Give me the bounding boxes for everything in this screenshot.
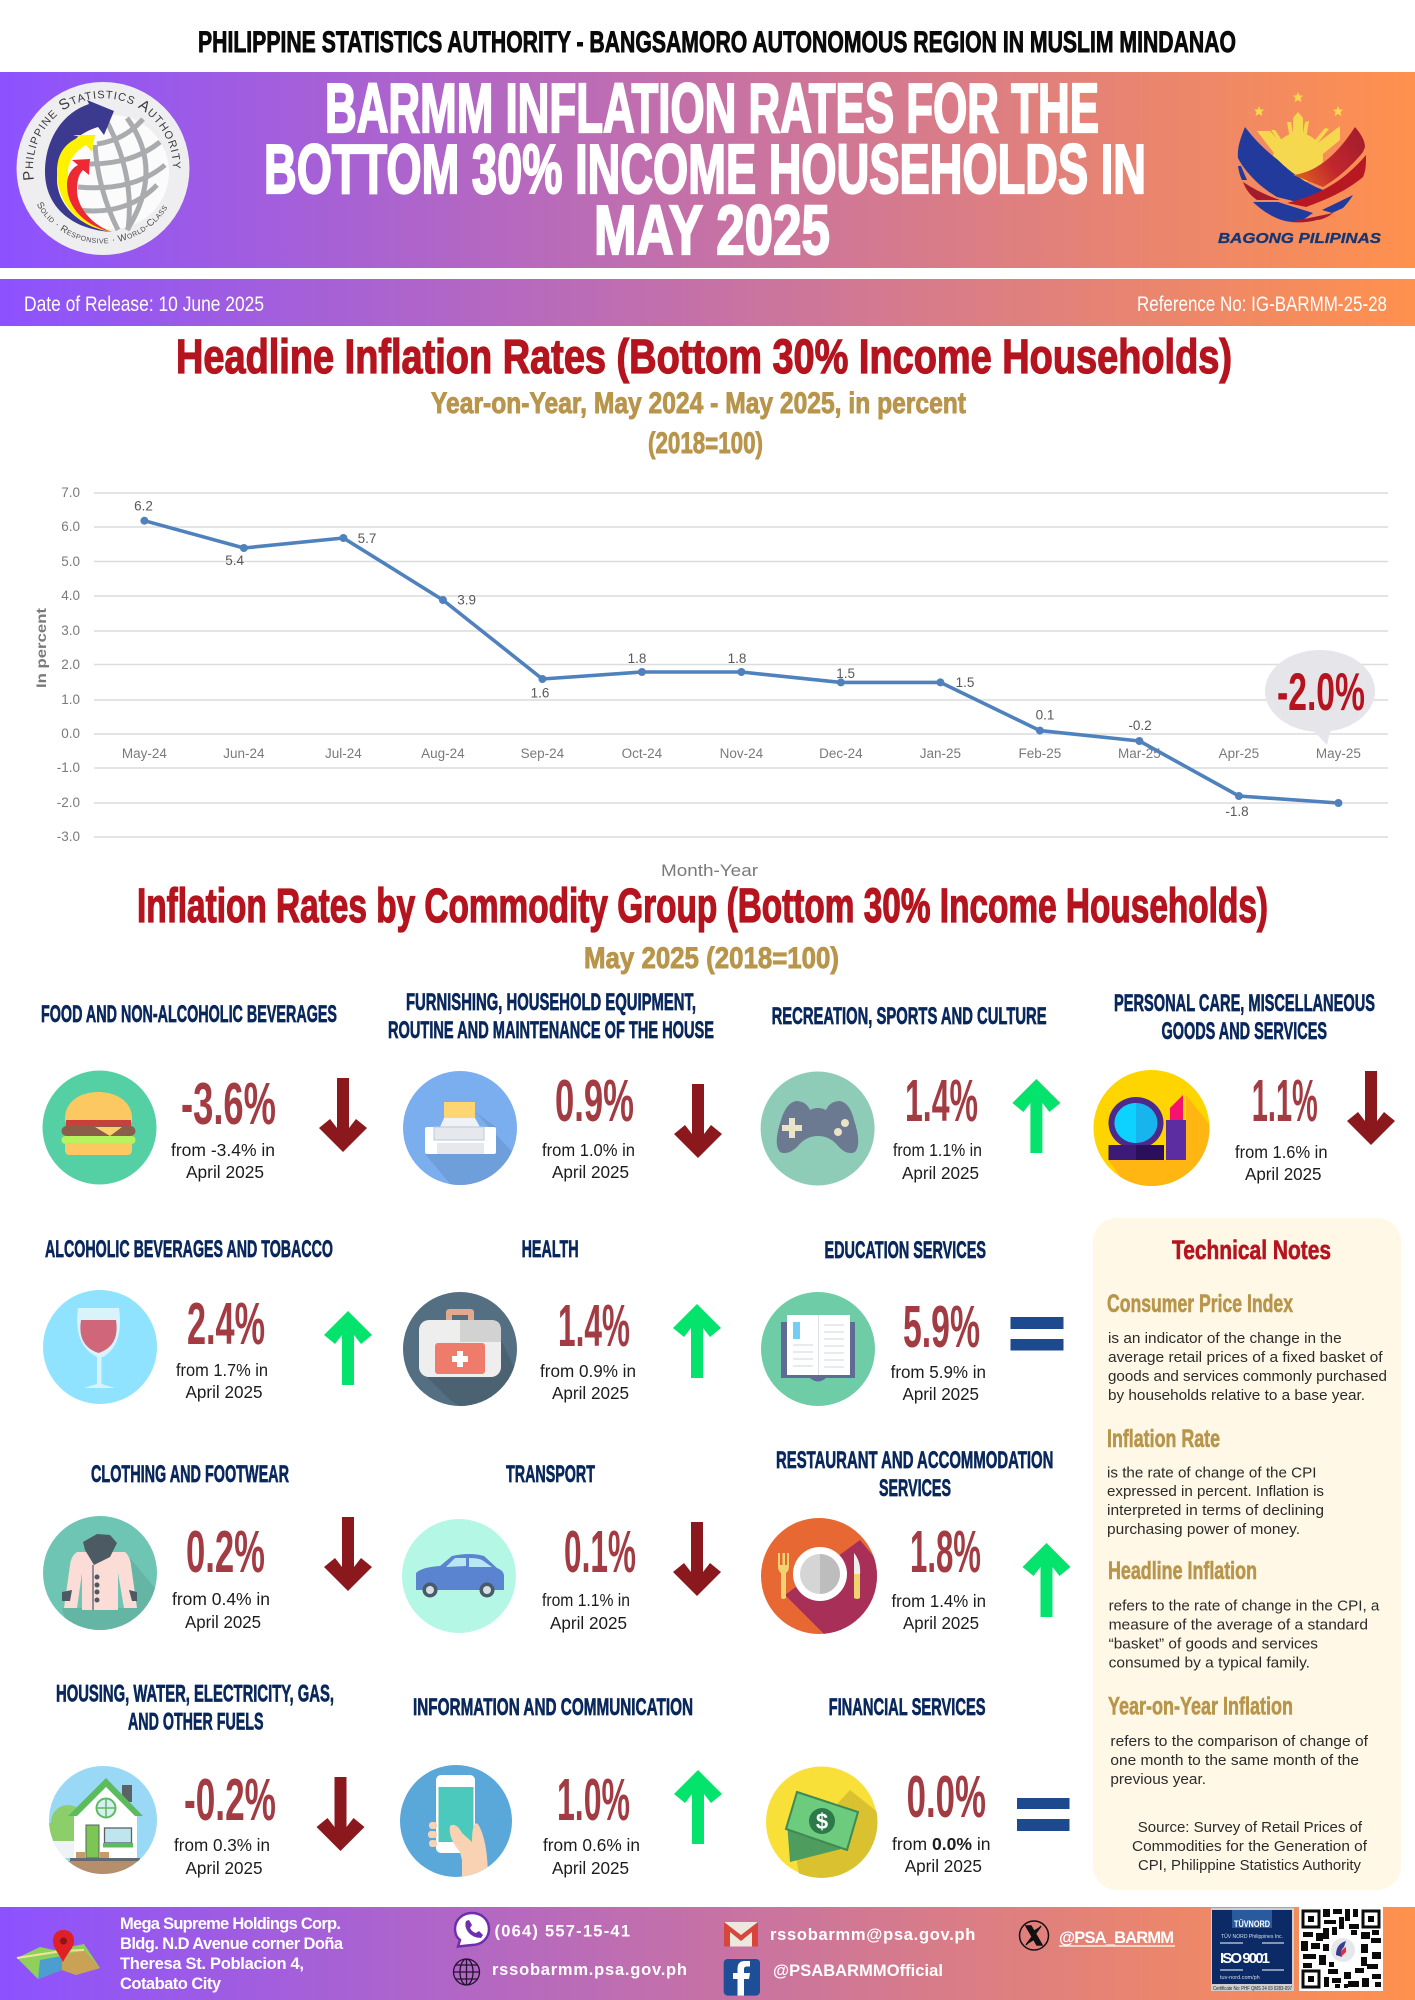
data labels: 5.4 — [225, 553, 245, 568]
arrow: down — [324, 1517, 372, 1591]
item: clothing and footwear — [43, 1461, 372, 1640]
data labels: 1.6 — [531, 686, 549, 700]
item: recreation: from 1.1% in — [893, 1140, 982, 1160]
item: financial services: from 0.0% in — [892, 1834, 990, 1854]
data labels — [134, 498, 1249, 819]
x axis labels: Aug-24 — [421, 746, 465, 761]
note: consumer price index: is an indicator of the change in the — [1108, 1331, 1342, 1347]
item: financial services — [766, 1698, 1070, 1878]
x axis labels — [122, 746, 1361, 761]
phone number: (064) 557-15-41 — [494, 1922, 630, 1940]
note: inflation rate — [1107, 1425, 1324, 1538]
note: inflation rate: purchasing power of money. — [1107, 1522, 1300, 1538]
note: consumer price index — [1107, 1290, 1387, 1404]
logo: Philippine Statistics Authority: Philippine Statistics Authority — [23, 90, 181, 180]
arrow: up — [673, 1304, 721, 1378]
y axis labels: -2.0 — [57, 795, 80, 810]
badge: ISO 9001 certification: TÜV NORD Philippines Inc. — [1221, 1933, 1283, 1940]
email address: rssobarmm@psa.gov.ph — [770, 1926, 975, 1944]
item: food and non-alcoholic beverages: -3.6% — [181, 1071, 276, 1137]
item: education services — [761, 1237, 1064, 1406]
item: transport: 0.1% — [564, 1519, 636, 1585]
item: health — [403, 1236, 721, 1420]
note: headline inflation: consumed by a typical family. — [1109, 1656, 1310, 1672]
y axis labels: 3.0 — [61, 623, 80, 638]
data labels: 1.5 — [836, 666, 855, 681]
icon: open book — [761, 1292, 875, 1406]
line chart: headline inflation — [33, 485, 1388, 880]
note: headline inflation — [1108, 1557, 1380, 1672]
item: health: from 0.9% in — [540, 1361, 636, 1381]
data labels: 0.1 — [1036, 708, 1054, 722]
address: Cotabato City — [120, 1975, 222, 1993]
commodity subtitle: May 2025 (2018=100) — [584, 942, 839, 975]
X handle: @PSA_BARMM — [1059, 1929, 1174, 1947]
equals sign: unchanged — [1017, 1798, 1070, 1831]
QR code — [1299, 1907, 1383, 1991]
item: financial services: FINANCIAL SERVICES — [829, 1694, 986, 1721]
item: education services: 5.9% — [903, 1294, 980, 1360]
item: clothing and footwear: April 2025 — [185, 1612, 261, 1632]
address: Theresa St. Poblacion 4, — [120, 1955, 304, 1973]
arrow: up — [1022, 1543, 1070, 1617]
item: restaurant and accommodation: SERVICES — [879, 1475, 951, 1502]
data labels: 5.7 — [358, 531, 376, 546]
item: financial services: 0.0% — [907, 1764, 986, 1830]
icon: phone — [455, 1913, 489, 1946]
icon: plate and cutlery — [761, 1518, 877, 1634]
item: furnishing: FURNISHING, HOUSEHOLD EQUIPMENT, — [406, 989, 696, 1016]
y axis labels: 6.0 — [61, 519, 80, 534]
note: consumer price index: average retail prices of a fixed basket of — [1108, 1350, 1384, 1366]
item: personal care: 1.1% — [1252, 1068, 1318, 1134]
x axis labels: Feb-25 — [1019, 746, 1061, 761]
data labels: 1.5 — [956, 675, 974, 690]
item: alcoholic beverages — [43, 1236, 372, 1404]
data labels: -0.2 — [1128, 718, 1152, 733]
arrow: up — [674, 1770, 722, 1844]
title banner — [0, 69, 1415, 269]
item: housing — [49, 1680, 364, 1878]
data labels: 1.8 — [628, 651, 646, 666]
item: recreation: April 2025 — [902, 1163, 979, 1183]
item: information and communication: 1.0% — [557, 1767, 630, 1833]
icon: coat — [43, 1516, 157, 1630]
icon: smartphone in hand — [400, 1765, 512, 1880]
icon: X — [1020, 1921, 1048, 1950]
item: restaurant and accommodation: RESTAURANT AND ACCOMMODATION — [776, 1447, 1053, 1474]
data labels: 1.8 — [728, 651, 746, 666]
source note: Commodities for the Generation of — [1132, 1839, 1368, 1855]
item: personal care — [1094, 990, 1395, 1190]
note: year-on-year inflation — [1108, 1692, 1369, 1788]
y axis labels: -3.0 — [57, 829, 80, 844]
item: restaurant and accommodation — [761, 1447, 1070, 1640]
note: inflation rate: expressed in percent. Inflation is — [1107, 1484, 1324, 1500]
footer — [0, 1907, 1415, 2000]
facebook handle: @PSABARMMOfficial — [773, 1962, 943, 1980]
x axis labels: Nov-24 — [720, 746, 764, 761]
item: housing: from 0.3% in — [174, 1835, 270, 1855]
arrow: down — [1347, 1071, 1395, 1145]
badge: ISO 9001 certification: Certificate No: PHF QMS 24 03 0283-097 — [1213, 1986, 1292, 1992]
website: rssobarmm.psa.gov.ph — [492, 1961, 687, 1979]
source note — [1132, 1820, 1368, 1874]
source note: CPI, Philippine Statistics Authority — [1138, 1858, 1362, 1874]
item: furnishing: April 2025 — [552, 1162, 629, 1182]
address — [120, 1915, 344, 1993]
item: information and communication — [400, 1694, 722, 1880]
item: alcoholic beverages: from 1.7% in — [176, 1360, 268, 1380]
item: furnishing — [388, 989, 722, 1190]
y axis labels: 7.0 — [61, 485, 80, 500]
icon: facebook — [724, 1959, 760, 1996]
release info bar — [0, 279, 1415, 326]
item: information and communication: from 0.6% in — [543, 1835, 640, 1855]
note: headline inflation: Headline Inflation — [1108, 1557, 1257, 1585]
arrow: down — [674, 1084, 722, 1158]
item: information and communication: April 2025 — [552, 1858, 629, 1878]
item: alcoholic beverages: April 2025 — [186, 1382, 262, 1402]
badge: ISO 9001 certification: TÜVNORD — [1234, 1919, 1270, 1930]
item: food and non-alcoholic beverages: April 2025 — [186, 1162, 264, 1182]
item: alcoholic beverages: 2.4% — [187, 1291, 265, 1357]
item: recreation: RECREATION, SPORTS AND CULTURE — [772, 1003, 1047, 1030]
data labels: -1.8 — [1225, 804, 1249, 819]
x axis labels: Jun-24 — [223, 746, 265, 761]
chart subtitle: (2018=100) — [648, 427, 763, 460]
item: housing: April 2025 — [186, 1858, 262, 1878]
arrow: down — [316, 1777, 364, 1851]
y axis labels: -1.0 — [57, 760, 80, 775]
address: Bldg. N.D Avenue corner Doña — [120, 1935, 344, 1953]
item: food and non-alcoholic beverages: from -3.4% in — [171, 1140, 275, 1160]
icon: mirror and lipstick — [1094, 1070, 1210, 1186]
y axis labels: 0.0 — [61, 726, 80, 741]
badge: ISO 9001 certification: ISO 9001 — [1220, 1950, 1270, 1967]
x axis labels: Sep-24 — [521, 746, 565, 761]
x axis labels: Jul-24 — [325, 746, 362, 761]
arrow: up — [1012, 1079, 1060, 1153]
data labels: 3.9 — [457, 592, 476, 608]
item: housing: HOUSING, WATER, ELECTRICITY, GAS, — [56, 1680, 334, 1708]
address: Mega Supreme Holdings Corp. — [120, 1915, 341, 1933]
panel: technical notes — [1093, 1218, 1401, 1890]
item: clothing and footwear: from 0.4% in — [172, 1589, 270, 1609]
item: housing: AND OTHER FUELS — [128, 1708, 264, 1736]
badge: ISO 9001 certification: tuv-nord.com/ph — [1220, 1975, 1260, 1981]
x axis labels: Apr-25 — [1219, 746, 1259, 761]
arrow: down — [319, 1078, 367, 1152]
x axis labels: Mar-25 — [1118, 746, 1161, 761]
icon: globe — [454, 1959, 480, 1985]
note: inflation rate: interpreted in terms of declining — [1107, 1503, 1324, 1519]
item: financial services: April 2025 — [905, 1856, 982, 1876]
note: year-on-year inflation: Year-on-Year Inflation — [1108, 1692, 1293, 1720]
item: furnishing: from 1.0% in — [542, 1140, 635, 1160]
item: transport — [402, 1461, 721, 1633]
y axis labels: 2.0 — [61, 657, 80, 672]
note: year-on-year inflation: refers to the comparison of change of — [1110, 1734, 1369, 1750]
note: headline inflation: measure of the average of a standard — [1109, 1618, 1368, 1634]
item: education services: EDUCATION SERVICES — [824, 1237, 986, 1264]
source note: Source: Survey of Retail Prices of — [1138, 1820, 1363, 1836]
item: housing: -0.2% — [184, 1767, 276, 1833]
item: food and non-alcoholic beverages — [41, 1001, 367, 1184]
data markers — [140, 517, 1342, 807]
icon: wine glass — [43, 1290, 157, 1404]
logo: Philippine Statistics Authority — [16, 82, 190, 255]
x axis labels: Jan-25 — [920, 746, 961, 761]
date of release: Date of Release: 10 June 2025 — [24, 293, 264, 316]
item: health: HEALTH — [522, 1236, 579, 1263]
chart subtitle — [431, 387, 966, 460]
main title — [264, 69, 1146, 269]
logo: Bagong Pilipinas: BAGONG PILIPINAS — [1218, 230, 1381, 247]
item: transport: April 2025 — [550, 1613, 627, 1633]
note: year-on-year inflation: previous year. — [1110, 1772, 1206, 1788]
x axis labels: Dec-24 — [819, 746, 863, 761]
x axis labels: May-24 — [122, 746, 167, 761]
logo: Philippine Statistics Authority: Solid · Responsive · World-Class — [38, 202, 167, 244]
icon: first aid kit — [403, 1292, 517, 1406]
badge: ISO 9001 certification — [1211, 1908, 1294, 1992]
chart subtitle: Year-on-Year, May 2024 - May 2025, in percent — [431, 387, 966, 420]
item: recreation: 1.4% — [905, 1068, 978, 1134]
item: clothing and footwear: 0.2% — [186, 1519, 265, 1585]
item: food and non-alcoholic beverages: FOOD AND NON-ALCOHOLIC BEVERAGES — [41, 1001, 337, 1028]
x axis title: Month-Year — [661, 861, 758, 880]
icon: map pin — [17, 1930, 100, 1979]
item: education services: April 2025 — [902, 1384, 979, 1404]
note: consumer price index: goods and services commonly purchased — [1108, 1369, 1387, 1385]
item: recreation — [761, 1003, 1060, 1186]
icon: house — [49, 1766, 158, 1877]
icon: car — [402, 1519, 516, 1633]
icon: money: $ — [816, 1809, 828, 1834]
equals sign: unchanged — [1010, 1317, 1064, 1350]
arrow: up — [324, 1311, 372, 1385]
item: health: April 2025 — [552, 1383, 629, 1403]
data labels: 6.2 — [134, 498, 153, 514]
icon: money — [766, 1766, 878, 1878]
item: information and communication: INFORMATION AND COMMUNICATION — [413, 1694, 693, 1721]
item: furnishing: 0.9% — [555, 1068, 634, 1134]
arrow: down — [673, 1522, 721, 1596]
x axis labels: May-25 — [1316, 746, 1361, 761]
icon: burger — [42, 1070, 156, 1184]
item: transport: from 1.1% in — [542, 1590, 630, 1610]
callout: latest value: -2.0% — [1277, 663, 1365, 722]
y axis labels: 5.0 — [61, 554, 80, 569]
note: inflation rate: is the rate of change of the CPI — [1107, 1466, 1316, 1482]
item: transport: TRANSPORT — [506, 1461, 595, 1488]
item: restaurant and accommodation: from 1.4% in — [892, 1591, 986, 1611]
item: health: 1.4% — [558, 1293, 630, 1359]
item: personal care: April 2025 — [1245, 1164, 1322, 1184]
logo: Bagong Pilipinas — [1218, 92, 1381, 247]
data line — [144, 521, 1338, 803]
item: education services: from 5.9% in — [891, 1362, 986, 1382]
note: consumer price index: by households relative to a base year. — [1108, 1388, 1365, 1404]
note: headline inflation: “basket” of goods and services — [1109, 1636, 1318, 1652]
note: headline inflation: refers to the rate of change in the CPI, a — [1109, 1598, 1380, 1614]
item: clothing and footwear: CLOTHING AND FOOTWEAR — [91, 1461, 289, 1488]
y axis labels: 1.0 — [61, 692, 80, 707]
icon: game controller — [761, 1072, 875, 1186]
y axis labels: 4.0 — [61, 588, 80, 603]
item: restaurant and accommodation: 1.8% — [910, 1519, 981, 1585]
x axis labels: Oct-24 — [622, 746, 663, 761]
note: year-on-year inflation: one month to the same month of the — [1110, 1753, 1359, 1769]
panel title: Technical Notes — [1172, 1235, 1331, 1265]
note: consumer price index: Consumer Price Index — [1107, 1290, 1293, 1318]
y axis labels — [57, 485, 80, 844]
y axis title: In percent — [33, 608, 49, 688]
icon: printer — [403, 1071, 520, 1190]
main title: MAY 2025 — [594, 191, 830, 269]
item: restaurant and accommodation: April 2025 — [903, 1613, 979, 1633]
callout: latest value — [1265, 650, 1375, 745]
note: inflation rate: Inflation Rate — [1107, 1425, 1220, 1453]
item: personal care: from 1.6% in — [1235, 1142, 1328, 1162]
item: alcoholic beverages: ALCOHOLIC BEVERAGES AND TOBACCO — [45, 1236, 333, 1263]
item: furnishing: ROUTINE AND MAINTENANCE OF THE HOUSE — [388, 1017, 714, 1044]
icon: email — [724, 1922, 758, 1946]
